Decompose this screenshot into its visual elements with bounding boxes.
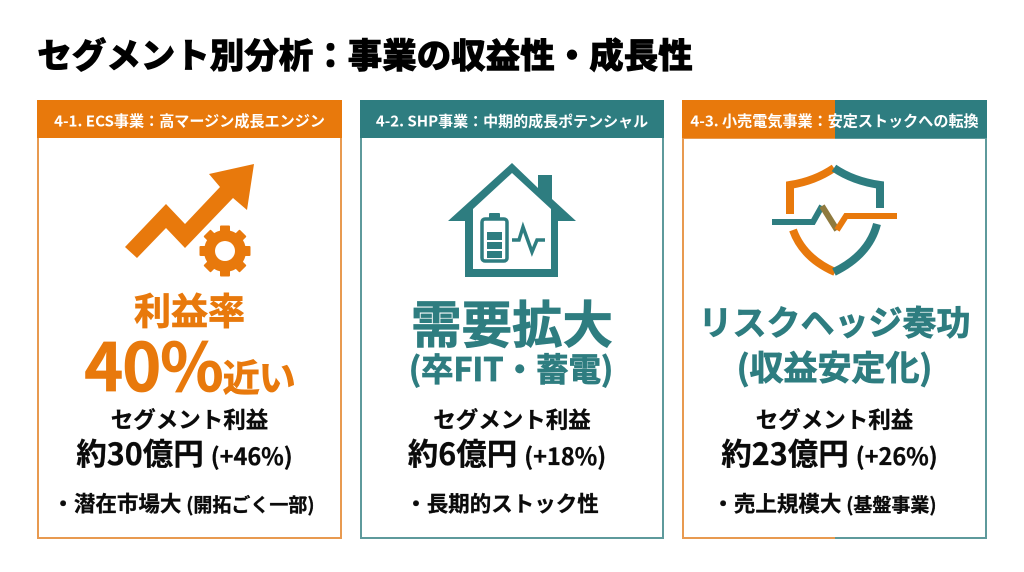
headline: demand expansion: 需要拡大 (411, 284, 613, 358)
icon: house with battery (448, 163, 576, 277)
headline: profit margin: 利益率 (134, 282, 245, 336)
panel heading: 4-1. ECS事業：高マージン成長エンジン (54, 109, 325, 131)
panel: SHP business (360, 100, 664, 539)
headline: 40 percent: 40%近い (84, 315, 295, 411)
panel heading: 4-2. SHP事業：中期的成長ポテンシャル (376, 110, 648, 132)
bullet note: ・潜在市場大 (開拓ごく一部) (52, 487, 315, 518)
icon: shield with pulse (772, 164, 897, 276)
segment profit label: セグメント利益 (756, 403, 913, 435)
segment profit value: 約6億円 (+18%) (408, 430, 606, 474)
bullet note: ・売上規模大 (基盤事業) (712, 487, 937, 518)
title: セグメント別分析：事業の収益性・成長性 (37, 28, 693, 78)
panel frame (37, 100, 342, 539)
headline: post-FIT and storage: (卒FIT・蓄電) (409, 344, 613, 391)
panel frame (682, 138, 987, 539)
panel heading: 4-3. 小売電気事業：安定ストックへの転換 (690, 109, 979, 131)
panel header (37, 100, 342, 138)
segment profit value: 約23億円 (+26%) (721, 430, 938, 474)
headline: risk hedge success: リスクヘッジ奏功 (698, 296, 970, 345)
headline: earnings stabilization: (収益安定化) (737, 341, 932, 390)
panel header (360, 100, 664, 138)
segment profit label: セグメント利益 (433, 403, 591, 435)
bullet note: ・長期的ストック性 (405, 487, 599, 518)
panel: ECS business (37, 100, 342, 539)
icon: growth arrow and gear (125, 164, 254, 276)
segment profit label: セグメント利益 (111, 403, 268, 435)
segment profit value: 約30億円 (+46%) (76, 430, 293, 474)
panel frame (360, 100, 664, 539)
panel: retail electricity business (682, 100, 987, 539)
panel header (682, 100, 987, 138)
